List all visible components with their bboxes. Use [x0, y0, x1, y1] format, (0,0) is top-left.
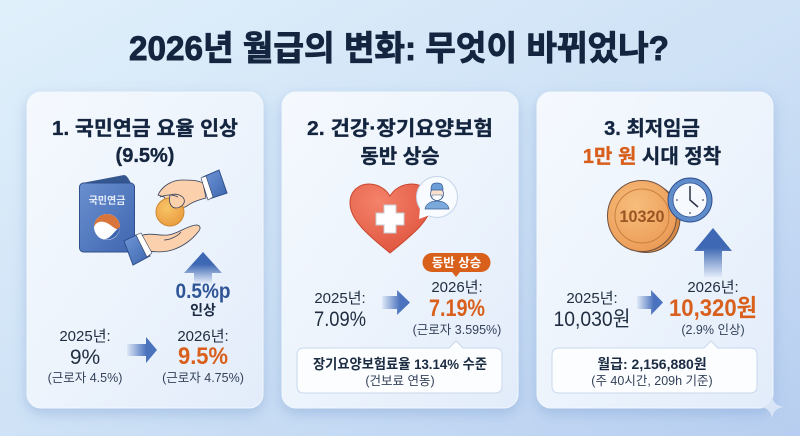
- callout: 0.5%p increase: 인상: [190, 302, 216, 318]
- arrow: up: [694, 228, 732, 277]
- callout: long-term care rate: (건보료 연동): [365, 374, 435, 388]
- icon: coin and clock: 10320: [620, 207, 664, 226]
- badge: rising together: 동반 상승: [432, 256, 481, 270]
- icon: coin and clock: [608, 178, 712, 252]
- callout: monthly pay: [552, 341, 757, 393]
- title: 2026년 월급의 변화: 무엇이 바뀌었나?: [129, 30, 669, 68]
- arrow: right: [127, 337, 157, 363]
- text: health 2025: [314, 290, 366, 331]
- heading: wage: 1만 원 시대 정착: [583, 145, 721, 168]
- text: wage 2025: 10,030원: [554, 308, 630, 331]
- icon: sparkle: [760, 395, 784, 419]
- callout: long-term care rate: 장기요양보험료율 13.14% 수준: [313, 356, 487, 372]
- callout: monthly pay: (주 40시간, 209h 기준): [591, 374, 713, 388]
- text: pension 2025: (근로자 4.5%): [48, 371, 122, 385]
- panel: health insurance: [282, 92, 518, 408]
- heading: health: [307, 117, 493, 168]
- text: wage 2026: [669, 279, 757, 337]
- heading: wage: 3. 최저임금: [604, 117, 700, 140]
- text: pension 2026: (근로자 4.75%): [162, 371, 244, 385]
- panel: national pension: [27, 92, 263, 408]
- arrow: up: [184, 252, 222, 283]
- text: health 2025: 2025년:: [314, 290, 366, 307]
- heading: pension: 1. 국민연금 요율 인상: [52, 117, 238, 140]
- text: health 2026: 7.19%: [429, 295, 485, 322]
- text: pension 2026: [162, 328, 244, 385]
- text: pension 2025: [48, 328, 122, 385]
- heading: pension: [52, 117, 238, 167]
- callout: long-term care rate: [297, 341, 502, 393]
- badge: rising together: [423, 253, 490, 277]
- arrow: right: [382, 290, 410, 315]
- text: health 2025: 7.09%: [314, 308, 366, 331]
- text: pension 2026: 2026년:: [177, 328, 229, 345]
- text: pension 2025: 2025년:: [59, 328, 111, 345]
- text: health 2026: 2026년:: [431, 279, 483, 296]
- text: wage 2026: (2.9% 인상): [681, 323, 745, 337]
- heading: health: 2. 건강·장기요양보험: [307, 117, 493, 140]
- text: pension 2026: 9.5%: [178, 343, 228, 370]
- panel: minimum wage: [537, 92, 773, 408]
- callout: 0.5%p increase: 0.5%p: [176, 280, 230, 303]
- text: wage 2025: 2025년:: [566, 290, 618, 307]
- arrow: right: [637, 290, 663, 315]
- text: pension 2025: 9%: [70, 346, 100, 369]
- icon: heart with cross and nurse: [350, 176, 458, 253]
- heading: health: 동반 상승: [360, 145, 440, 168]
- icon: pension book and hands with coin: [80, 170, 227, 265]
- text: wage 2026: 10,320원: [669, 295, 757, 322]
- callout: 0.5%p increase: [176, 280, 230, 318]
- icon: pension book and hands with coin: 국민연금: [89, 194, 125, 207]
- text: wage 2025: [554, 290, 630, 331]
- heading: pension: (9.5%): [116, 145, 174, 167]
- text: health 2026: [413, 279, 501, 337]
- heading: wage: [583, 117, 721, 168]
- callout: monthly pay: 월급: 2,156,880원: [597, 356, 707, 372]
- text: wage 2026: 2026년:: [687, 279, 739, 296]
- text: health 2026: (근로자 3.595%): [413, 323, 501, 337]
